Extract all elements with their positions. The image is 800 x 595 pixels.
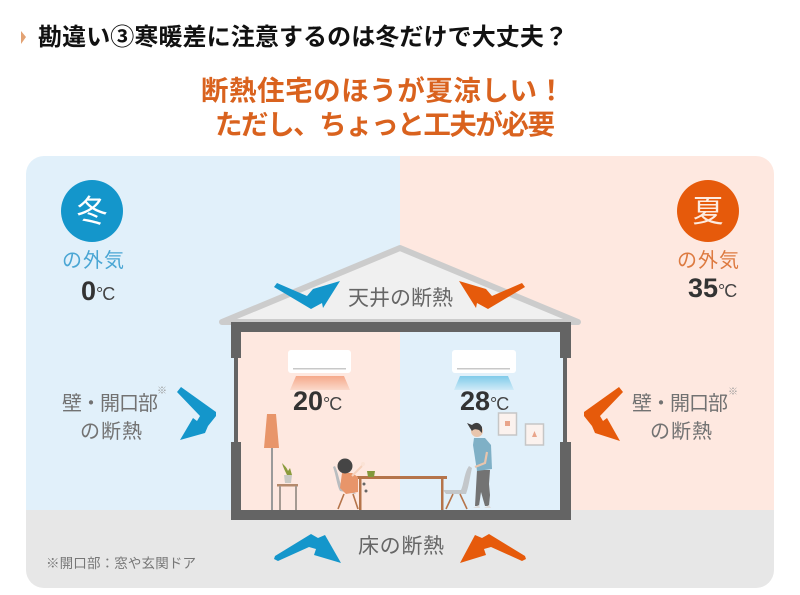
arrow: wall winter bbox=[177, 387, 216, 440]
panel: background winter summer ground bbox=[26, 156, 774, 588]
dining table bbox=[357, 471, 447, 510]
wall insulation label: right bbox=[632, 387, 738, 443]
wall insulation label: right: ※ bbox=[728, 387, 738, 398]
panel: summer outside air bbox=[677, 180, 739, 303]
panel: winter outside air bbox=[61, 180, 124, 306]
wall insulation label: left bbox=[62, 386, 167, 443]
subtitle heading: 断熱住宅のほうが夏涼しい！ bbox=[201, 75, 565, 106]
arrow: floor winter bbox=[274, 534, 341, 563]
wall insulation label: left: の断熱 bbox=[80, 420, 142, 443]
room: summer side bbox=[400, 332, 563, 510]
floor insulation label: 床の断熱 bbox=[358, 535, 444, 558]
air conditioner: winter bbox=[288, 350, 351, 390]
room: winter side bbox=[238, 332, 400, 510]
person standing bbox=[467, 423, 492, 508]
room temperature: 20: 20°C bbox=[293, 386, 342, 416]
wall insulation label: left: 壁・開口部 bbox=[62, 392, 158, 415]
arrow: roof summer bbox=[459, 281, 525, 309]
subtitle heading bbox=[201, 75, 565, 140]
subtitle heading: ただし、ちょっと工夫が必要 bbox=[215, 109, 555, 140]
winter temperature: 0°C bbox=[81, 276, 115, 306]
arrow: roof winter bbox=[274, 281, 340, 309]
wall insulation label: right: の断熱 bbox=[650, 420, 712, 443]
arrow: wall summer bbox=[584, 387, 623, 441]
house frame bbox=[231, 322, 571, 520]
icon: winter badge: 冬 bbox=[76, 194, 108, 229]
wall insulation label: right: 壁・開口部 bbox=[632, 392, 728, 415]
summer label: の外気 bbox=[677, 249, 739, 272]
empty chair bbox=[443, 466, 472, 509]
wall insulation label: left: ※ bbox=[157, 386, 167, 397]
icon: summer badge: 夏 bbox=[692, 194, 724, 229]
ceiling insulation label: 天井の断熱 bbox=[348, 287, 453, 310]
arrow: floor summer bbox=[460, 534, 526, 563]
summer temperature: 35°C bbox=[688, 273, 737, 303]
side table with plant bbox=[277, 463, 298, 510]
icon: title bullet bbox=[21, 31, 26, 44]
child on chair bbox=[333, 458, 368, 509]
title: 勘違い③寒暖差に注意するのは冬だけで大丈夫？ bbox=[38, 24, 568, 51]
winter label: の外気 bbox=[62, 249, 124, 272]
house bbox=[222, 248, 578, 520]
roof bbox=[222, 248, 578, 322]
air conditioner: summer bbox=[452, 350, 516, 390]
footnote: ※開口部：窓や玄関ドア bbox=[46, 556, 196, 571]
room temperature: 28: 28°C bbox=[460, 386, 509, 416]
wall picture frames bbox=[498, 413, 544, 445]
floor lamp bbox=[264, 414, 279, 510]
